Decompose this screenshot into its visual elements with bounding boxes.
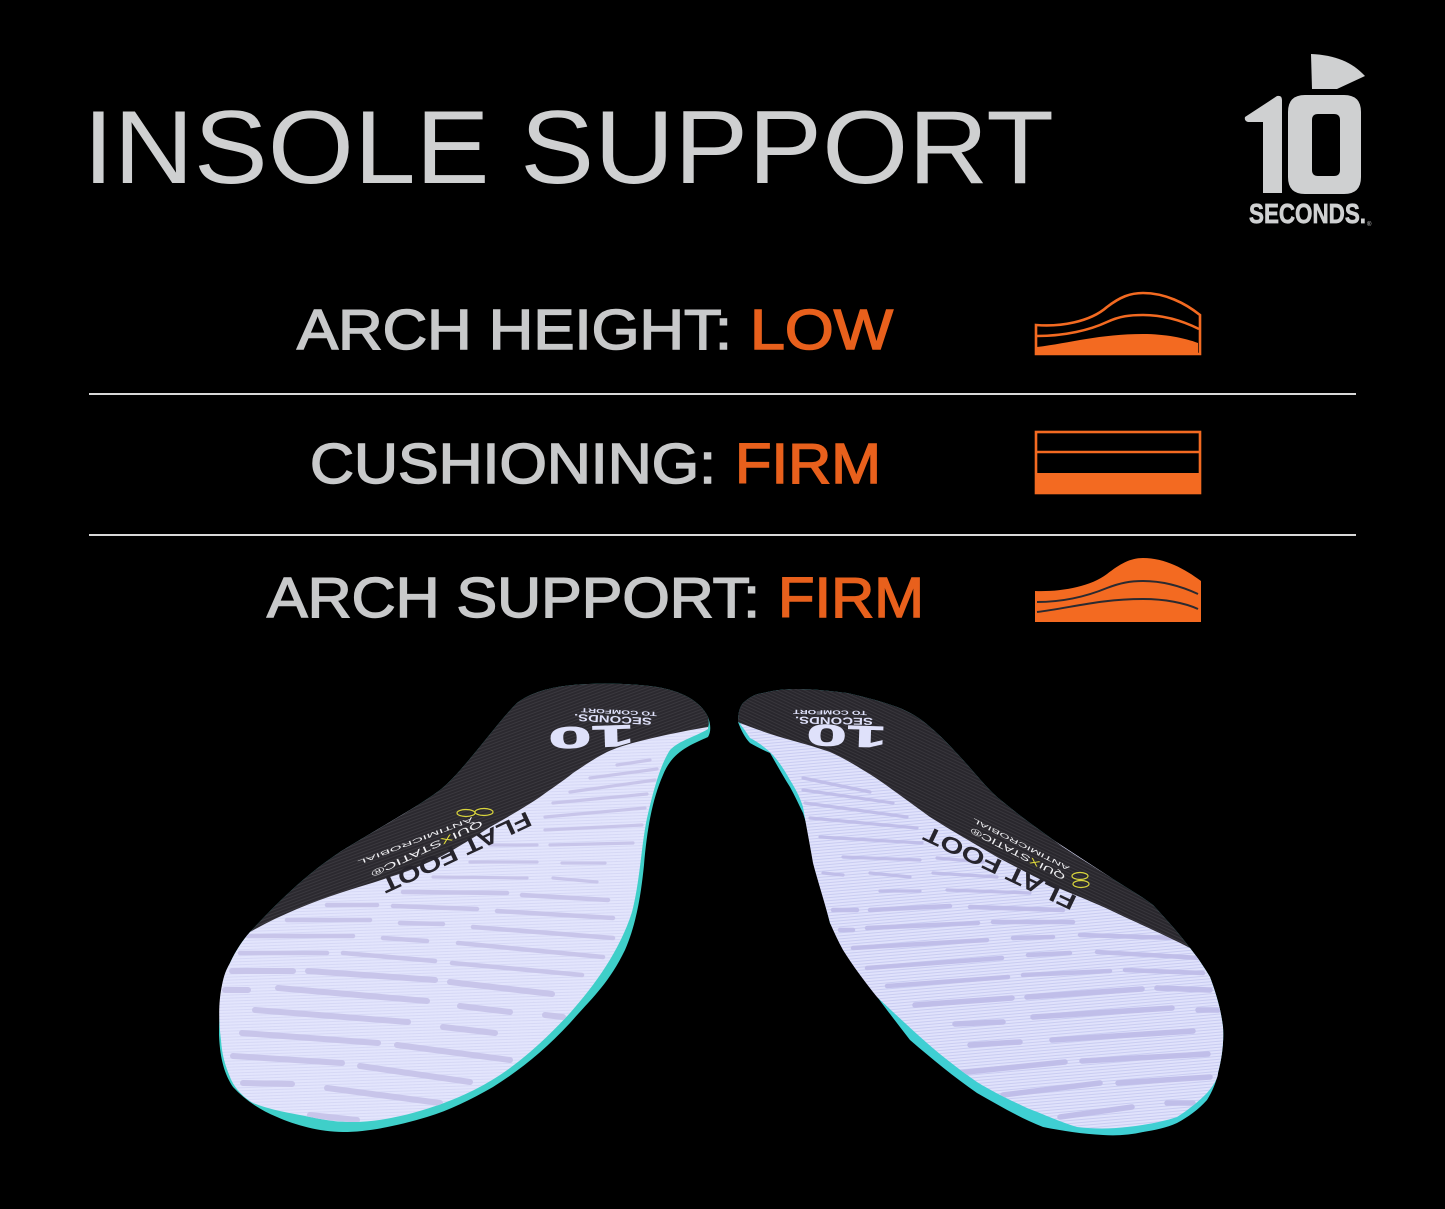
heel dark panel: right: [738, 689, 1190, 948]
product label: left: FLAT FOOT: [376, 806, 535, 898]
logo: 10 Seconds: SECONDS.: [1249, 198, 1366, 229]
divider: [89, 393, 1356, 395]
top fabric: left: [219, 717, 708, 1122]
title: INSOLE SUPPORT: [83, 90, 1054, 206]
row: arch height low: ARCH HEIGHT:: [297, 298, 732, 362]
heel dark panel: left: [250, 684, 709, 932]
product label: left: [355, 806, 535, 898]
row: arch height low: LOW: [750, 298, 893, 362]
brand mark: left: 10: [548, 718, 635, 754]
brand mark: right: 10: [806, 717, 887, 753]
logo: 10 Seconds: [1245, 54, 1372, 229]
icon: firm arch layers: [1035, 558, 1201, 622]
icon: firm cushioning layers: [1035, 432, 1201, 494]
product label: right: QUIXSTATIC®: [968, 825, 1067, 882]
product label: left: QUI XSTATIC®: [369, 818, 484, 879]
product label: left: ANTIMICROBIAL: [355, 815, 473, 865]
row: arch support firm: FIRM: [778, 566, 924, 630]
row: cushioning firm: FIRM: [735, 432, 881, 496]
brand mark: right: TO COMFORT: [792, 708, 867, 715]
product label: right: FLAT FOOT: [919, 821, 1080, 915]
stripes: right: [803, 778, 1218, 1117]
top fabric: right: [740, 710, 1223, 1128]
row: cushioning firm: CUSHIONING:: [310, 432, 716, 496]
icon: low arch layers: [1036, 293, 1200, 354]
left insole: [219, 684, 710, 1132]
right insole: [738, 689, 1223, 1135]
product label: right: [919, 816, 1089, 915]
divider: [89, 534, 1356, 536]
logo: 10 Seconds: ®: [1367, 221, 1372, 228]
brand mark: right: [792, 708, 887, 753]
row: arch height low: [297, 298, 893, 362]
stripes: left: [225, 760, 657, 1120]
brand mark: left: TO COMFORT: [580, 706, 657, 716]
brand mark: left: SECONDS.: [573, 711, 652, 726]
foam edge: left: [219, 684, 710, 1132]
foam edge: right: [738, 689, 1223, 1135]
brand mark: right: SECONDS.: [795, 714, 873, 726]
product label: right: ANTIMICROBIAL: [971, 816, 1071, 871]
row: arch support firm: ARCH SUPPORT:: [267, 566, 760, 630]
brand mark: left: [548, 706, 657, 754]
row: cushioning firm: [310, 432, 881, 496]
